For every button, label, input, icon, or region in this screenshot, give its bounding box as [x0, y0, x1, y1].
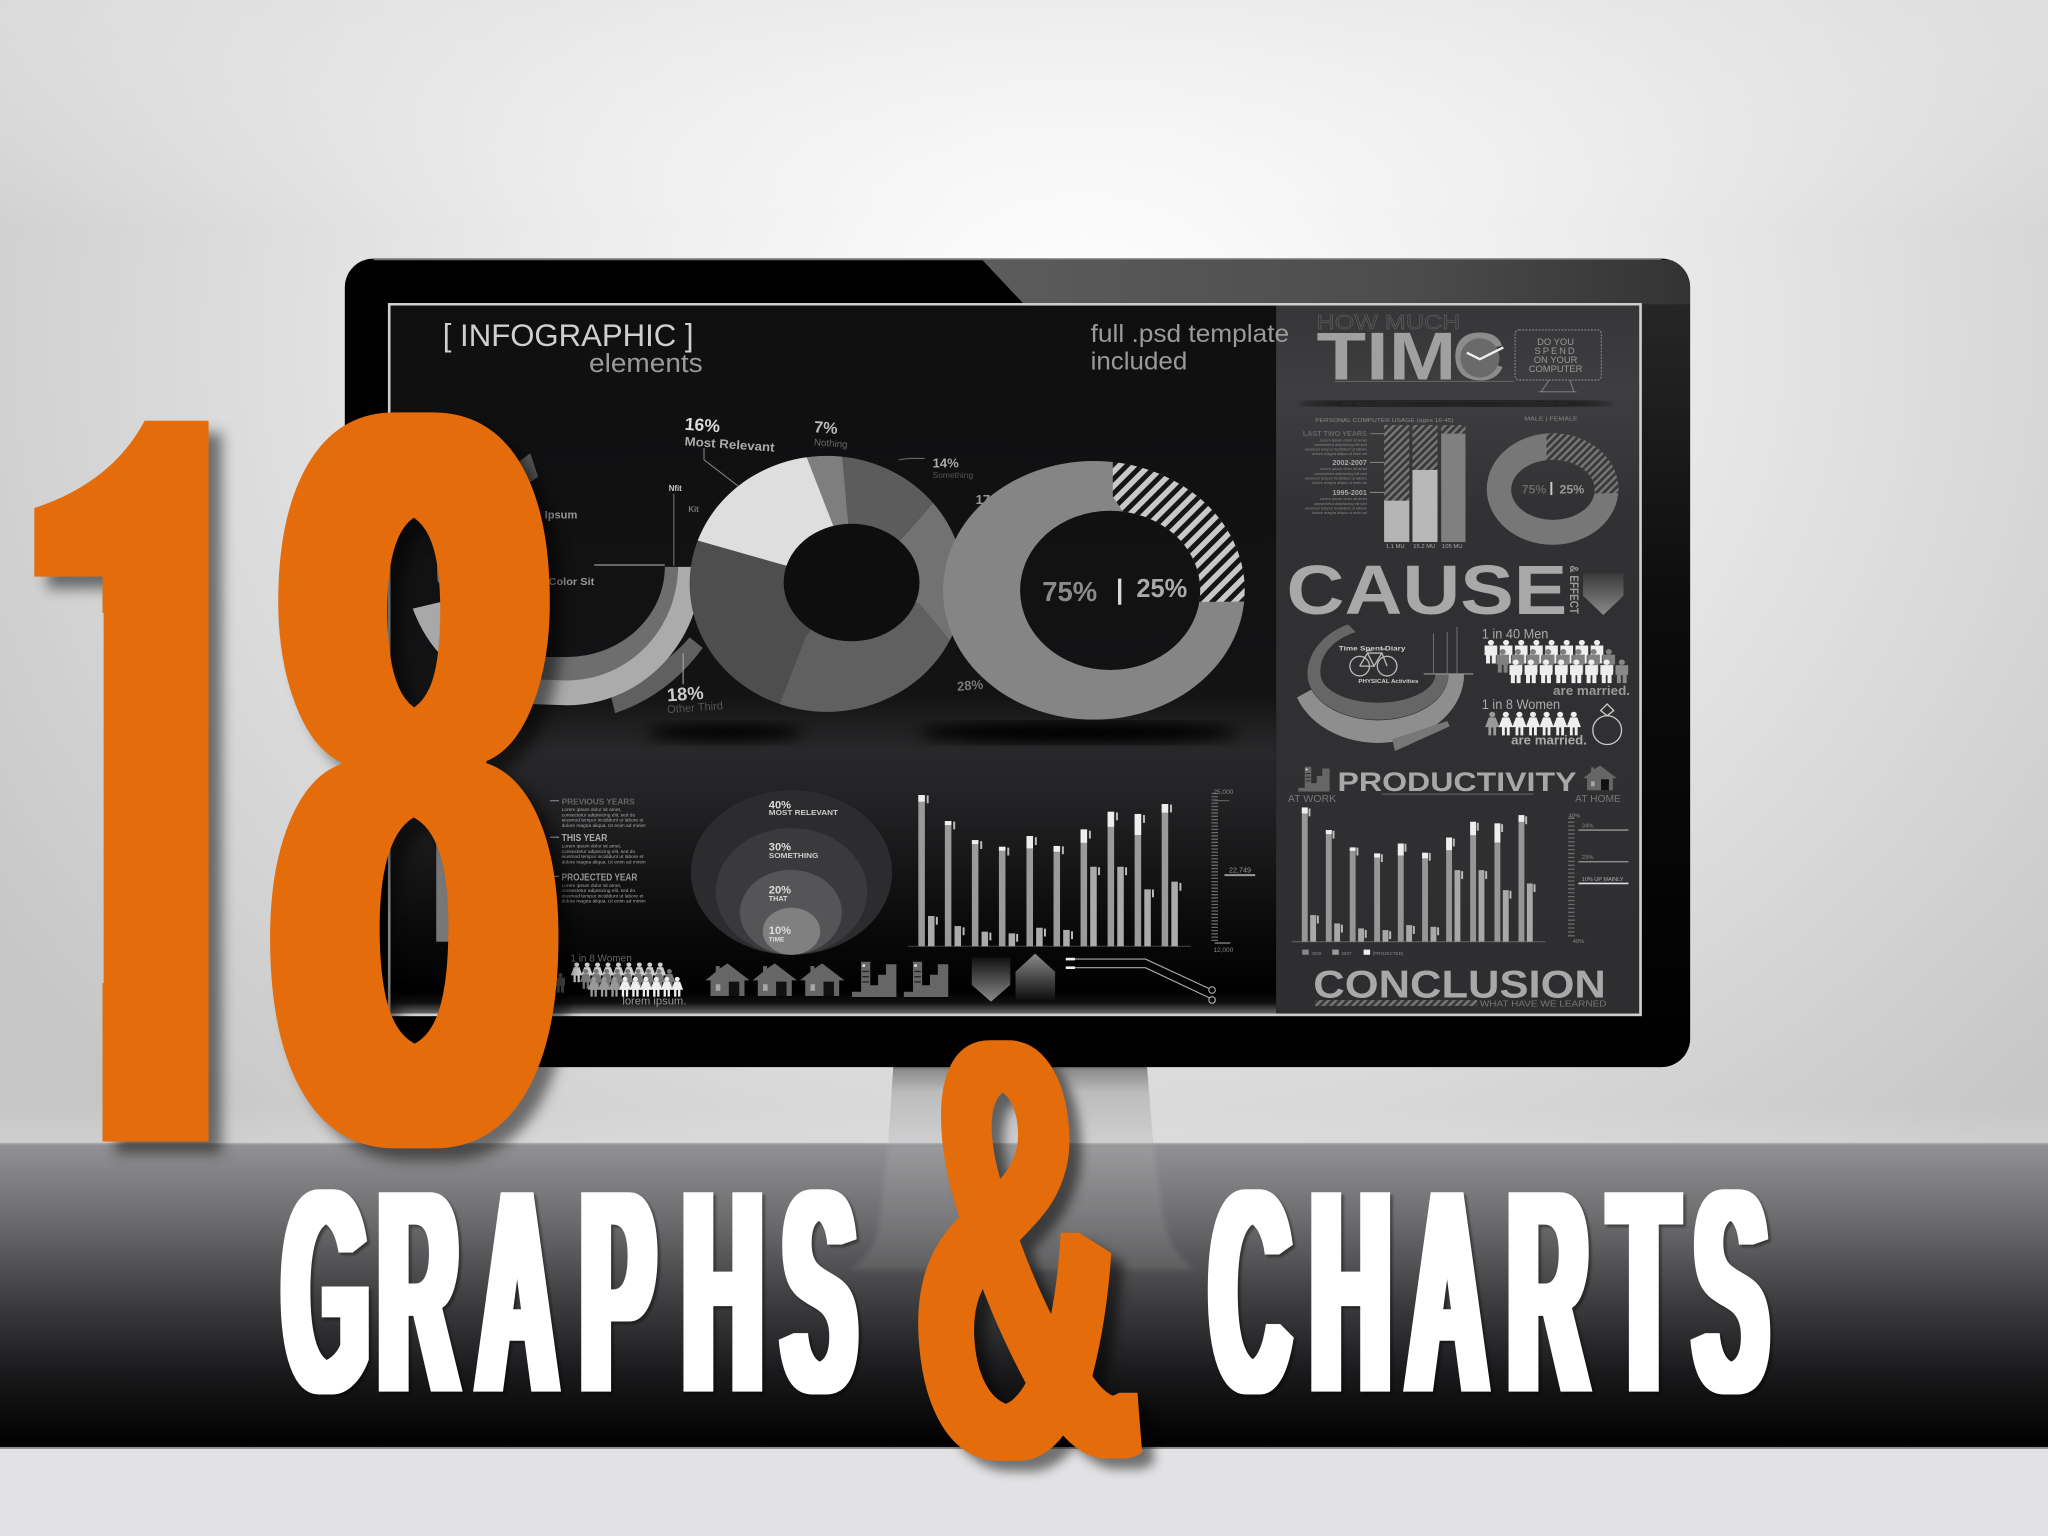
screen frame [389, 304, 1640, 1015]
callout: do you spend: ON YOUR [1534, 354, 1578, 365]
bottom band [0, 1143, 2048, 1449]
left chart labels [545, 484, 699, 588]
timeline labels: consectetur adipisicing elit sed [1314, 442, 1367, 447]
slice: right [899, 503, 956, 640]
slice: upper right [842, 456, 933, 540]
callout: do you spend: COMPUTER [1529, 363, 1583, 374]
donut labels: Other Third [667, 700, 723, 716]
bar chart: personal computer usage: 15.2 MU [1413, 544, 1435, 550]
arrow up [1016, 953, 1055, 1000]
scale: left bar chart: 22,749 [1229, 866, 1251, 874]
nested oval chart: 40% [769, 799, 791, 811]
heading: infographic elements [443, 318, 703, 378]
legend: previous years: PREVIOUS YEARS [562, 797, 635, 807]
outer pale ring [529, 567, 701, 705]
hidden slice in counter [413, 601, 445, 660]
callout: do you spend: DO YOU [1537, 336, 1574, 347]
heading: productivity: PRODUCTIVITY [1337, 767, 1577, 797]
hatched bar tops [1384, 425, 1465, 501]
donut chart: 75% 25% [943, 461, 1245, 720]
slice: lower [780, 602, 950, 712]
donut chart: male female: 75% [1522, 483, 1546, 497]
timeline labels: 1995-2001 [1333, 489, 1367, 497]
bar chart: personal computer usage: 1.1 MU [1386, 544, 1405, 550]
donut chart: segmented [668, 418, 990, 713]
legend: projected year [552, 872, 646, 905]
donut chart: 75% 25%: 75% [1042, 576, 1097, 607]
people icons: 1 in 40 men [1482, 627, 1630, 698]
scale: productivity: 40% [1569, 814, 1580, 820]
slice: small grey [806, 456, 848, 526]
legend: previous years: consectetur adipisicing elit, sed do [562, 812, 635, 818]
timeline labels: consectetur adipisicing elit sed [1314, 501, 1367, 506]
bezel top edge highlight [374, 258, 1661, 260]
panel shadow band [1298, 401, 1612, 406]
donut chart: male female: 25% [1560, 483, 1584, 497]
donut chart: male female [1486, 416, 1618, 545]
icons: houses [705, 963, 844, 996]
legend: projected year: eiusmod tempor incididunt ut labore et [562, 893, 644, 899]
nested oval chart: 30% [769, 841, 791, 853]
timeline labels: consectetur adipisicing elit sed [1314, 471, 1367, 476]
timeline labels: Lorem ipsum dolor sit amet [1320, 496, 1368, 501]
donut labels: 7% [813, 418, 839, 438]
icon: ring [1593, 704, 1622, 744]
legend: this year: Lorem ipsum dolor sit amet, [562, 844, 621, 850]
heading: conclusion: WHAT HAVE WE LEARNED [1480, 998, 1607, 1008]
icon: bicycle [1350, 649, 1397, 676]
nested oval chart: 10% [769, 925, 791, 937]
bar chart: personal computer usage: 105 MU [1442, 544, 1462, 550]
chart legend [1302, 950, 1404, 956]
donut labels: Nothing [814, 437, 848, 451]
monitor stand [888, 1064, 1153, 1144]
ring chart: physical activities: PHYSICAL Activities [1358, 679, 1419, 685]
icons: office stairs [852, 962, 948, 997]
scale: productivity [1569, 814, 1628, 945]
text: 8 [273, 198, 555, 1359]
left chart labels: Ipsum [545, 510, 577, 522]
people icons: 1 in 8 women [556, 953, 686, 1007]
screen counter bar [436, 833, 455, 942]
scale: productivity: 34% [1582, 823, 1593, 829]
legend: previous years: Lorem ipsum dolor sit amet, [562, 807, 621, 813]
bar chart: productivity [1292, 807, 1545, 956]
scale: left bar chart: 25,000 [1213, 789, 1234, 796]
heading: conclusion: CONCLUSION [1313, 963, 1606, 1006]
screen right panel [1276, 306, 1639, 1014]
heading: how much time: HOW MUCH [1317, 312, 1460, 334]
heading: cause & effect: & EFFECT [1567, 566, 1580, 615]
people icons: 1 in 8 women: 1 in 8 Women [1482, 697, 1560, 712]
heading: productivity [1288, 765, 1621, 805]
icon: clock: C [1452, 320, 1505, 395]
nested oval chart: TIME [769, 937, 785, 944]
scale: productivity: 10% UP MAINLY [1582, 877, 1624, 883]
legend: this year: THIS YEAR [562, 833, 607, 844]
people icons: 1 in 8 women [1482, 697, 1622, 747]
heading: how much time: TIM [1317, 319, 1456, 394]
ring tail [1392, 721, 1450, 751]
timeline labels: Lorem ipsum dolor sit amet [1320, 466, 1368, 471]
bar chart: personal computer usage [1303, 418, 1465, 550]
legend: projected year: dolore magna aliqua. Ut enim ad minim [562, 899, 646, 905]
chart legend: (PROJECTED) [1373, 951, 1404, 956]
ground shadows [647, 722, 1237, 743]
slice: white 16% [698, 457, 834, 566]
legend: projected year: PROJECTED YEAR [562, 872, 637, 883]
callout: do you spend: SPEND [1535, 345, 1577, 356]
timeline labels: Lorem ipsum dolor sit amet [1320, 437, 1368, 442]
people icons: 1 in 40 men: 1 in 40 Men [1482, 627, 1548, 642]
timeline labels: 2002-2007 [1333, 459, 1367, 467]
donut labels: 14% [933, 456, 959, 471]
heading: infographic elements: elements [589, 350, 703, 378]
arrow down [972, 957, 1010, 1002]
legend: previous years: dolore magna aliqua. Ut enim ad minim [562, 823, 646, 829]
donut labels: 18% [666, 682, 704, 705]
heading: productivity: AT HOME [1575, 794, 1621, 805]
bar chart: left [908, 795, 1191, 946]
timeline labels: dolore magna aliqua ut enim ad [1312, 510, 1367, 515]
heading: psd template note [1091, 321, 1289, 376]
number 1: 1 [0, 0, 300, 1428]
top fragment [515, 453, 538, 485]
left chart labels: Nfit [669, 484, 682, 493]
timeline labels [1303, 430, 1384, 515]
bar chart: personal computer usage: PERSONAL COMPUTER USAGE (ages 16-45) [1315, 418, 1454, 424]
donut chart: 75% 25%: 25% [1136, 575, 1187, 603]
heading: cause & effect: CAUSE [1287, 551, 1567, 629]
nested oval chart: 20% [769, 884, 791, 896]
icon: cause arrow [1583, 573, 1624, 615]
chart legend: 2006 [1311, 951, 1322, 956]
slice: left [690, 540, 812, 704]
scale: productivity: 40% [1573, 939, 1584, 945]
legend: previous years [550, 797, 646, 829]
legend: previous years: eiusmod tempor incididunt ut labore et [562, 818, 644, 824]
ring tail [609, 637, 703, 713]
legend: this year [550, 833, 646, 865]
screen left panel [391, 306, 1276, 1014]
chart legend: 2007 [1341, 951, 1352, 956]
ring chart: physical activities: Time Spent Diary [1339, 645, 1406, 652]
nested oval chart: SOMETHING [769, 852, 819, 860]
people icons: 1 in 40 men: are married. [1553, 683, 1630, 698]
screen frame top layer [389, 304, 1640, 1015]
left ring chart [413, 453, 703, 713]
people icons: 1 in 8 women: lorem ipsum. [622, 995, 686, 1007]
callout: do you spend [1515, 330, 1601, 392]
hatched 25% slice [1112, 462, 1245, 602]
bars [1384, 501, 1409, 542]
donut chart: male female: MALE | FEMALE [1524, 417, 1578, 423]
nested oval chart: THAT [769, 895, 788, 903]
people icons: 1 in 8 women: 1 in 8 Women [570, 953, 632, 964]
connector lines [1066, 958, 1215, 1003]
stand reflected foot on band [849, 1144, 1195, 1270]
timeline labels: dolore magna aliqua ut enim ad [1312, 451, 1367, 456]
donut labels: 17 [976, 492, 990, 507]
timeline labels: eiusmod tempor incididunt ut labore [1305, 505, 1367, 510]
legend: previous, this, projected years [550, 797, 646, 905]
ring chart: physical activities [1297, 624, 1473, 751]
legend: projected year: consectetur adipisicing elit, sed do [562, 888, 635, 894]
timeline labels: dolore magna aliqua ut enim ad [1312, 480, 1367, 485]
timeline labels: LAST TWO YEARS [1303, 430, 1367, 438]
legend: this year: consectetur adipisicing elit, sed do [562, 849, 635, 855]
legend: this year: dolore magna aliqua. Ut enim ad minim [562, 859, 646, 865]
timeline labels: eiusmod tempor incididunt ut labore [1305, 447, 1367, 452]
nested oval chart [691, 790, 892, 955]
monitor bezel [345, 259, 1690, 1067]
heading: psd template note: full .psd template [1091, 321, 1289, 348]
donut labels [666, 414, 990, 716]
middle ring [529, 567, 678, 680]
donut hole [784, 524, 920, 641]
heading: infographic elements: [ INFOGRAPHIC ] [443, 318, 694, 353]
upper arc in counter [437, 536, 445, 590]
heading: psd template note: included [1091, 349, 1187, 376]
donut labels: Something [933, 470, 973, 480]
legend: this year: eiusmod tempor incididunt ut labore et [562, 854, 644, 860]
people icons: 1 in 8 women: are married. [1511, 732, 1587, 747]
left chart labels: Kit [688, 505, 699, 514]
donut labels: 16% [684, 414, 721, 436]
scale: productivity: 23% [1582, 855, 1593, 861]
heading: productivity: AT WORK [1288, 794, 1337, 805]
legend: projected year: Lorem ipsum dolor sit amet, [562, 883, 621, 889]
donut labels: 28% [956, 677, 984, 694]
donut labels: Most Relevant [684, 434, 775, 455]
word: charts: CHARTS [1210, 1130, 1768, 1454]
scale: left bar chart [1213, 789, 1255, 954]
outer ring [1297, 674, 1464, 743]
word: graphs: GRAPHS [283, 1130, 856, 1454]
nested oval chart: MOST RELEVANT [769, 809, 839, 817]
monitor [345, 259, 1690, 1067]
scale: left bar chart: 12,000 [1213, 947, 1234, 954]
timeline labels: eiusmod tempor incididunt ut labore [1305, 475, 1367, 480]
heading: how much time [1317, 312, 1601, 395]
inner ring [1307, 624, 1448, 720]
bezel glare [982, 260, 1690, 1067]
left chart labels: Color Sit [549, 577, 595, 588]
